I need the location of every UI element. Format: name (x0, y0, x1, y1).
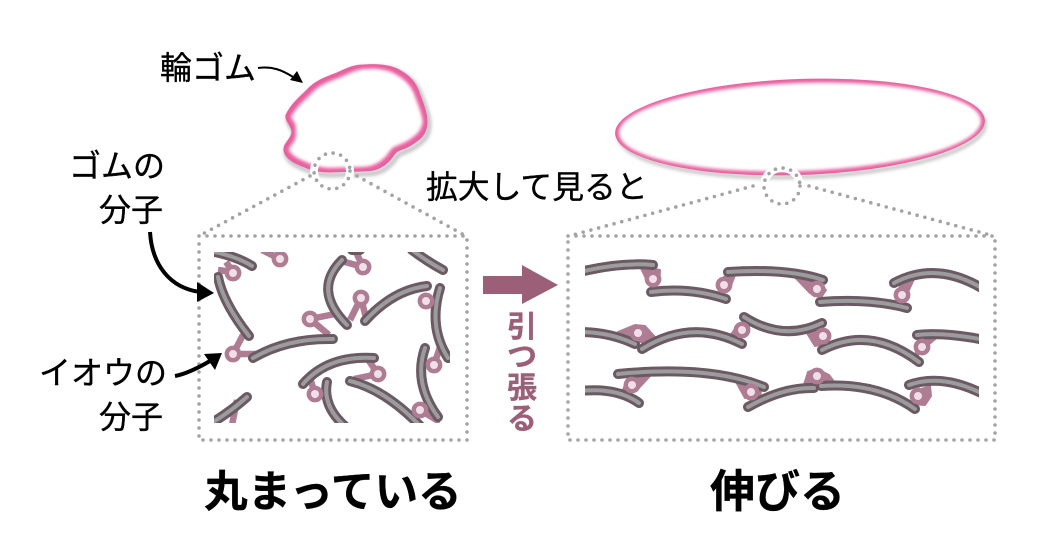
panel: curled molecules (199, 236, 467, 440)
label: pull (vertical): つ (507, 341, 537, 374)
arrow: to sulfur molecule (175, 353, 222, 376)
rubber band: stretched (613, 73, 987, 183)
label: rubber molecule (69, 148, 165, 228)
magnifier circle left (314, 153, 350, 189)
arrow: to rubber band (258, 67, 303, 83)
label: sulfur molecule: 分子 (99, 399, 163, 435)
molecule chains right (580, 264, 985, 409)
label: rubber band: 輪ゴム (160, 50, 256, 86)
label: pull (vertical): 張 (507, 372, 537, 405)
label: sulfur molecule: イオウの (39, 355, 167, 391)
heading: curled: 丸まっている (204, 469, 462, 517)
label: rubber molecule: 分子 (99, 192, 163, 228)
arrow: to rubber molecule (150, 232, 214, 302)
heading: stretched: 伸びる (710, 466, 845, 517)
sulfur links left (218, 250, 441, 425)
sulfur atoms right (626, 273, 928, 402)
label: pull (vertical): 引 (507, 311, 537, 344)
molecule chains left (210, 250, 448, 430)
sulfur atoms left (227, 253, 440, 416)
label: pull (vertical): る (507, 403, 537, 436)
arrow: pull (483, 265, 558, 304)
label: sulfur molecule (39, 355, 167, 435)
magnifier circle right (764, 168, 800, 204)
rubber band: relaxed (284, 65, 429, 175)
zoom guide lines (199, 176, 994, 236)
label: rubber molecule: ゴムの (69, 148, 165, 184)
panel: stretched molecules (568, 236, 995, 440)
label: pull (vertical) (507, 311, 537, 436)
text: magnify: 拡大して見ると (426, 169, 648, 205)
sulfur links right (618, 266, 940, 405)
